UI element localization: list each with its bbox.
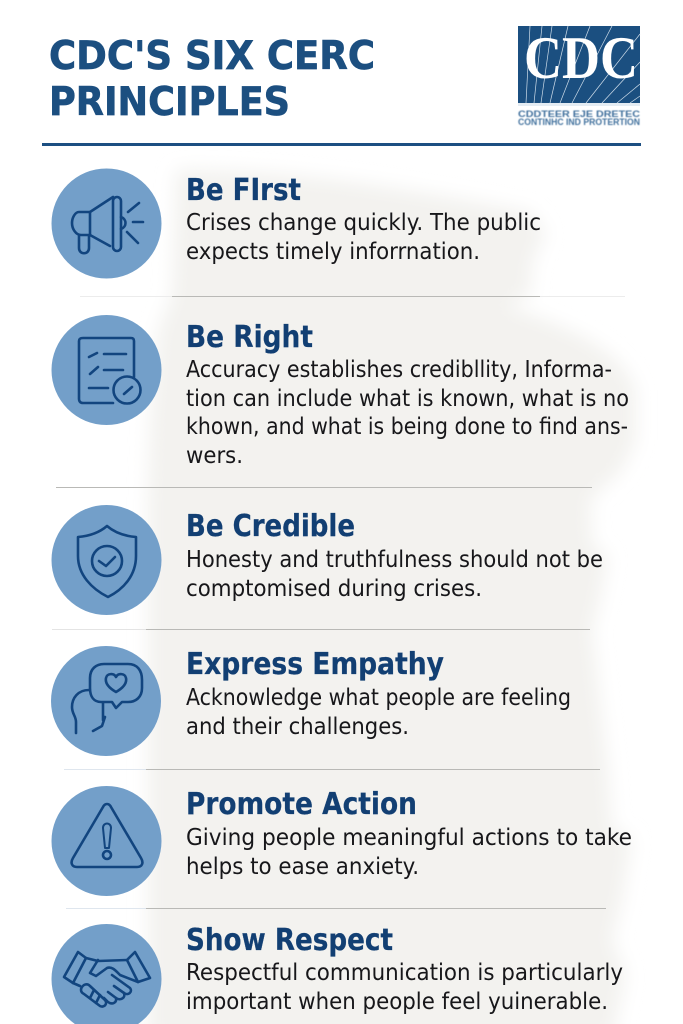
- text: Honesty and truthfulness should not be: [186, 545, 603, 573]
- row: Be Right: [52, 315, 629, 469]
- icon: shield: [52, 505, 162, 615]
- text: [186, 208, 541, 265]
- title: PRINCIPLES: [49, 80, 290, 125]
- text: [186, 545, 603, 602]
- heading: Show Respect: [186, 923, 393, 958]
- CDC logo: CDDTEER EJE DRETEC: [518, 109, 641, 119]
- text: [186, 355, 629, 469]
- icon: checklist: [52, 315, 162, 425]
- text: wers.: [186, 441, 243, 469]
- text: khown, and what is being done to find ans-: [186, 412, 628, 440]
- text: Crises change quickly. The public: [186, 208, 541, 236]
- text: Acknowledge what people are feeling: [186, 683, 571, 711]
- icon: handshake: [52, 924, 162, 1024]
- text: [186, 683, 571, 740]
- text: [186, 823, 632, 880]
- text: helps to ease anxiety.: [186, 852, 419, 880]
- heading: Express Empathy: [186, 647, 444, 682]
- CDC logo: CDC: [524, 25, 638, 91]
- CDC logo: CONTINHC IND PROTERTION: [518, 117, 640, 127]
- row: Express Empathy: [51, 646, 571, 756]
- heading: Be Right: [186, 320, 313, 355]
- text: [186, 958, 623, 1015]
- text: Accuracy establishes credibllity, Informa-: [186, 355, 612, 383]
- row: Be Credible: [52, 505, 603, 615]
- icon: megaphone: [52, 168, 162, 278]
- title: CDC'S SIX CERC: [49, 34, 375, 79]
- icon: person with heart speech bubble: [51, 646, 161, 756]
- text: tion can include what is known, what is no: [186, 384, 629, 412]
- row: Show Respect: [52, 923, 623, 1024]
- text: Respectful communication is particularly: [186, 958, 623, 986]
- text: expects timely inforrnation.: [186, 237, 480, 265]
- row: Be First: [52, 168, 541, 278]
- text: comptomised during crises.: [186, 574, 482, 602]
- heading: Promote Action: [186, 787, 417, 822]
- heading: Be Credible: [186, 509, 355, 544]
- heading: Be FIrst: [186, 173, 301, 208]
- panel: soft grey background behind text: [148, 170, 636, 1024]
- header rule: [42, 143, 641, 146]
- row: Promote Action: [52, 786, 632, 896]
- text: Giving people meaningful actions to take: [186, 823, 632, 851]
- text: and their challenges.: [186, 712, 409, 740]
- text: important when people feel yuinerable.: [186, 987, 608, 1015]
- CDC logo: [518, 25, 641, 127]
- icon: warning triangle: [52, 786, 162, 896]
- title: [49, 34, 375, 125]
